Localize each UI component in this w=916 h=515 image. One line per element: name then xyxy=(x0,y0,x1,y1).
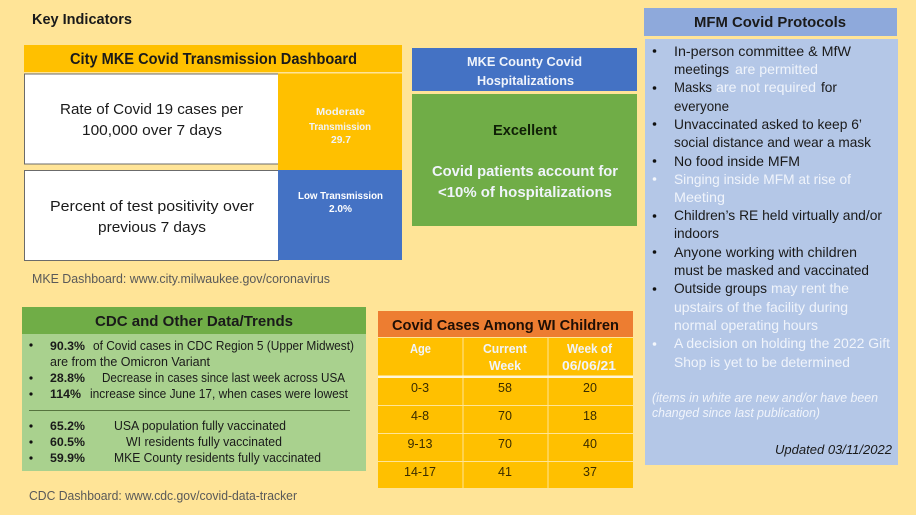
protocols list xyxy=(645,39,898,465)
CDC trends list: WI residents fully vaccinated xyxy=(126,435,282,449)
hospitalizations heading: MKE County Covid xyxy=(467,54,582,69)
protocols list: normal operating hours xyxy=(674,317,818,333)
hospitalizations heading xyxy=(412,48,637,91)
CDC heading xyxy=(22,307,366,334)
protocols list: Children’s RE held virtually and/or xyxy=(674,207,882,223)
panel: cases among WI children xyxy=(378,311,633,488)
protocols list: Meeting xyxy=(674,189,725,205)
children table: 70 xyxy=(498,437,512,451)
title: Key Indicators xyxy=(32,12,132,28)
protocols list: social distance and wear a mask xyxy=(674,134,872,150)
protocols list: everyone xyxy=(674,98,729,114)
panel: county hospitalizations xyxy=(412,48,637,226)
CDC trends list xyxy=(22,334,366,471)
source: CDC dashboard: CDC Dashboard: www.cdc.gov/covid-data-tracker xyxy=(29,489,297,503)
protocols list: may rent the xyxy=(771,280,849,296)
status: moderate transmission xyxy=(278,74,402,170)
updated date: Updated 03/11/2022 xyxy=(775,442,893,457)
protocols list: are permitted xyxy=(735,61,818,77)
protocols list: In-person committee & MfW xyxy=(674,43,852,59)
CDC trends list: 60.5% xyxy=(50,435,85,449)
CDC trends list: MKE County residents fully vaccinated xyxy=(114,451,321,465)
status: moderate transmission: Transmission xyxy=(309,122,371,133)
children table: 14-17 xyxy=(404,465,436,479)
children table: Age xyxy=(410,342,431,356)
children table: 41 xyxy=(498,465,512,479)
protocols list: are not required xyxy=(716,79,816,95)
children table: 37 xyxy=(583,465,597,479)
panel: city transmission dashboard xyxy=(24,45,402,260)
row: test positivity xyxy=(24,170,278,260)
CDC trends list: 90.3% xyxy=(50,339,85,353)
children table xyxy=(378,338,633,488)
row: test positivity: Percent of test positivity over xyxy=(50,198,254,215)
children table heading xyxy=(378,311,633,337)
protocols list: A decision on holding the 2022 Gift xyxy=(674,335,890,351)
children table heading: Covid Cases Among WI Children xyxy=(392,317,619,334)
protocols list: Masks xyxy=(674,79,712,95)
protocols heading xyxy=(644,8,897,36)
children table: 06/06/21 xyxy=(562,359,616,373)
protocols list: Outside groups xyxy=(674,280,767,296)
children table: 40 xyxy=(583,437,597,451)
status: low transmission xyxy=(278,170,402,260)
row: test positivity: previous 7 days xyxy=(98,219,206,236)
protocols heading: MFM Covid Protocols xyxy=(694,14,846,31)
CDC trends list: Decrease in cases since last week across USA xyxy=(102,371,346,385)
protocols list: Singing inside MFM at rise of xyxy=(674,171,851,187)
hospitalizations heading: Hospitalizations xyxy=(477,73,574,88)
hospitalizations status xyxy=(412,94,637,226)
status: moderate transmission: 29.7 xyxy=(331,135,351,146)
protocols list: meetings xyxy=(674,61,729,77)
children table: Current xyxy=(483,342,528,356)
children table: 0-3 xyxy=(411,381,429,395)
CDC trends list: 28.8% xyxy=(50,371,85,385)
protocols list: Anyone working with children xyxy=(674,244,857,260)
protocols list: for xyxy=(821,79,837,95)
status: moderate transmission: Moderate xyxy=(316,107,365,118)
protocols list: No food inside MFM xyxy=(674,153,800,169)
status: low transmission: Low Transmission xyxy=(298,191,383,202)
protocols list: must be masked and vaccinated xyxy=(674,262,869,278)
children table: 9-13 xyxy=(407,437,433,451)
children table: 58 xyxy=(498,381,512,395)
CDC trends list: 65.2% xyxy=(50,419,85,433)
status: low transmission: 2.0% xyxy=(329,204,352,215)
dashboard heading: City MKE Covid Transmission Dashboard xyxy=(70,51,357,68)
CDC trends list: increase since June 17, when cases were lowest xyxy=(90,387,348,401)
children table: Week xyxy=(489,359,521,373)
note: items in white xyxy=(652,391,878,420)
protocols list: indoors xyxy=(674,225,719,241)
row: case rate xyxy=(24,74,278,164)
CDC trends list: are from the Omicron Variant xyxy=(50,355,211,369)
children table: 18 xyxy=(583,409,597,423)
source: MKE dashboard: MKE Dashboard: www.city.milwaukee.gov/coronavirus xyxy=(32,272,330,286)
protocols list: Shop is yet to be determined xyxy=(674,354,850,370)
protocols list: Unvaccinated asked to keep 6’ xyxy=(674,116,862,132)
dashboard heading xyxy=(24,45,402,72)
CDC trends list: 114% xyxy=(50,387,81,401)
protocols list: upstairs of the facility during xyxy=(674,299,848,315)
CDC heading: CDC and Other Data/Trends xyxy=(95,313,293,330)
children table: 70 xyxy=(498,409,512,423)
children table: 20 xyxy=(583,381,597,395)
row: case rate: 100,000 over 7 days xyxy=(82,122,222,139)
note: items in white: changed since last publication) xyxy=(652,406,820,420)
CDC trends list: of Covid cases in CDC Region 5 (Upper Midwest) xyxy=(93,339,354,353)
hospitalizations status: Excellent xyxy=(493,123,557,139)
hospitalizations status: Covid patients account for xyxy=(432,163,618,180)
row: case rate: Rate of Covid 19 cases per xyxy=(60,101,243,118)
note: items in white: (items in white are new and/or have been xyxy=(652,391,878,405)
CDC trends list: 59.9% xyxy=(50,451,85,465)
children table: 4-8 xyxy=(411,409,429,423)
CDC trends list: USA population fully vaccinated xyxy=(114,419,286,433)
children table: Week of xyxy=(567,342,613,356)
hospitalizations status: <10% of hospitalizations xyxy=(438,184,612,201)
panel: CDC data and trends xyxy=(22,307,366,471)
panel: MFM protocols xyxy=(644,8,898,465)
